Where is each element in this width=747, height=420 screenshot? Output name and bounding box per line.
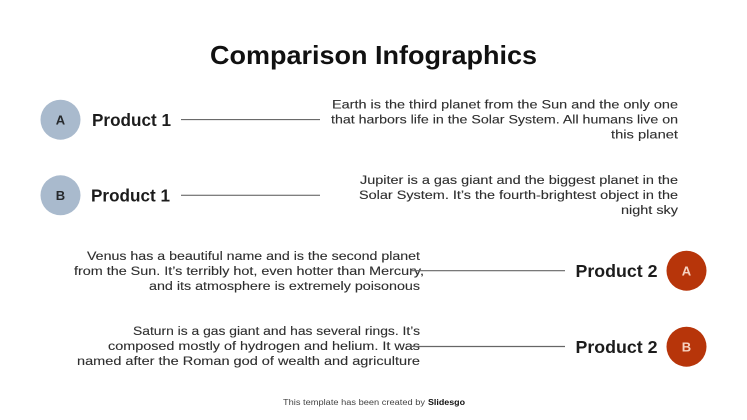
- connector line: [410, 346, 565, 348]
- icon: badge B: [666, 327, 706, 367]
- icon: badge B: [40, 175, 80, 215]
- icon: badge B: B: [682, 340, 691, 354]
- text block: Jupiter: [359, 173, 679, 217]
- title: Comparison Infographics: [210, 40, 537, 70]
- text block: Jupiter: Jupiter is a gas giant and the biggest planet in the: [360, 173, 678, 187]
- row: Product 1 B: [40, 173, 679, 217]
- row: Product 1 A: [40, 98, 679, 142]
- icon: badge A: A: [56, 112, 66, 128]
- row: Product 2 B: [77, 324, 706, 368]
- text block: Venus: Venus has a beautiful name and is the second planet: [87, 249, 421, 263]
- text block: Jupiter: night sky: [621, 203, 679, 217]
- text block: Saturn: [77, 324, 420, 368]
- connector line: [181, 194, 320, 196]
- label: Product 2: Product 2: [576, 337, 658, 357]
- text block: Earth: Earth is the third planet from the Sun and the only one: [332, 98, 678, 112]
- connector line: [181, 119, 320, 121]
- text block: Saturn: named after the Roman god of wealth and agriculture: [77, 354, 420, 368]
- label: Product 1: Product 1: [91, 186, 170, 206]
- icon: badge A: A: [682, 264, 692, 278]
- text block: Saturn: Saturn is a gas giant and has several rings. It’s: [133, 324, 420, 338]
- label: Product 2: Product 2: [576, 261, 658, 281]
- text block: Earth: this planet: [611, 128, 679, 142]
- text block: Venus: [74, 249, 424, 293]
- icon: badge A: [666, 251, 706, 291]
- text block: Earth: [331, 98, 679, 142]
- icon: badge A: [40, 100, 80, 140]
- text block: Venus: from the Sun. It’s terribly hot, even hotter than Mercury,: [74, 264, 424, 278]
- connector line: [410, 270, 565, 272]
- text block: Jupiter: Solar System. It’s the fourth-brightest object in the: [359, 188, 678, 202]
- text block: Saturn: composed mostly of hydrogen and helium. It was: [108, 339, 420, 353]
- footer credit: Slidesgo: [428, 398, 465, 407]
- text block: Earth: that harbors life in the Solar System. All humans live on: [331, 112, 678, 126]
- footer credit: [283, 398, 465, 407]
- icon: badge B: B: [56, 188, 65, 203]
- footer credit: This template has been created by: [283, 398, 425, 407]
- label: Product 1: Product 1: [92, 110, 171, 130]
- row: Product 2 A: [74, 249, 706, 293]
- text block: Venus: and its atmosphere is extremely poisonous: [149, 279, 420, 293]
